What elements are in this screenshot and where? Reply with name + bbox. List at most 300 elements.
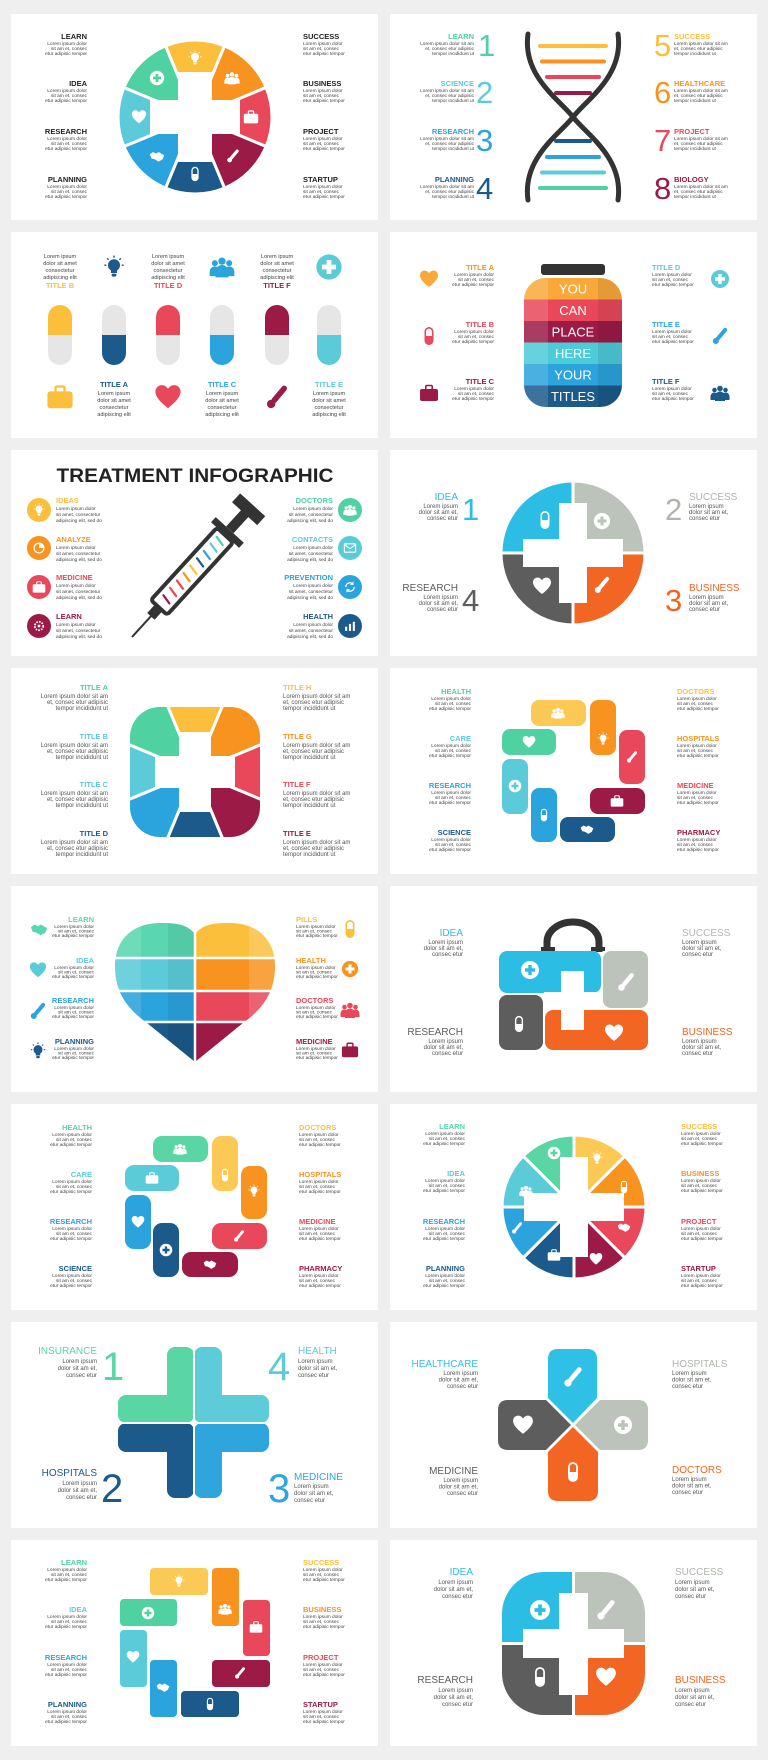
left labels: etur adipisic tempor — [429, 706, 471, 712]
right labels: HOSPITALS — [672, 1359, 728, 1370]
left labels: Lorem ipsum — [428, 1039, 463, 1045]
right labels: etur adipisic tempor — [677, 847, 719, 853]
left labels — [50, 1123, 93, 1289]
item 1: 1 — [102, 1345, 124, 1389]
right labels: Lorem ipsum dolor — [303, 41, 343, 47]
left items: etur adipisic tempor — [52, 933, 94, 939]
item 2 — [42, 1467, 123, 1511]
right labels: SUCCESS — [681, 1122, 717, 1131]
top icons — [104, 254, 342, 280]
right labels — [299, 1123, 342, 1289]
top text columns: TITLE B — [46, 281, 75, 290]
left labels: Lorem ipsum dolor — [52, 1179, 92, 1185]
left labels: etur adipisic tempor — [423, 1283, 465, 1289]
right labels: Lorem ipsum dolor — [299, 1226, 339, 1232]
top text columns: adipiscing elit — [260, 275, 294, 281]
left items: sit am et, consec — [58, 1010, 95, 1016]
left labels: Lorem ipsum dolor — [425, 1178, 465, 1184]
top text columns: TITLE F — [263, 281, 291, 290]
right titles: tempor incididunt ut — [283, 803, 336, 809]
right items: adipiscing elit, sed do — [287, 595, 333, 601]
left items: Lorem ipsum dolor — [454, 329, 494, 335]
right numbered items: et, consec etur adipisic — [674, 141, 723, 147]
left labels: sit am et, consec — [435, 701, 472, 707]
item 1: consec etur — [66, 1373, 97, 1379]
left labels: consec etur — [442, 1702, 473, 1708]
left titles: Lorem ipsum dolor sit am — [41, 694, 108, 700]
left labels: etur adipisic tempor — [45, 194, 87, 200]
right labels: MEDICINE — [299, 1217, 336, 1226]
right numbered items: 8 — [654, 171, 671, 206]
left labels: SCIENCE — [438, 828, 471, 837]
right items: MEDICINE — [296, 1037, 333, 1046]
left titles: et, consec etur adipisic — [47, 700, 108, 706]
left items: LEARN — [68, 915, 94, 924]
top text columns: dolor sit amet — [43, 261, 77, 267]
right labels: BUSINESS — [682, 1027, 733, 1038]
panel: heart — [11, 886, 378, 1092]
right labels: sit am et, consec — [303, 1667, 340, 1673]
left labels: Lorem ipsum — [438, 1580, 473, 1586]
left items: LEARN — [56, 612, 82, 621]
loop icons — [132, 1144, 260, 1269]
right items: DOCTORS — [296, 996, 333, 1005]
item 4: 4 — [268, 1345, 290, 1389]
right labels: PHARMACY — [677, 828, 720, 837]
panel: ribbon circle — [390, 1104, 757, 1310]
right labels: sit am et, consec — [299, 1231, 336, 1237]
left labels: consec etur — [447, 1384, 478, 1390]
left labels — [429, 687, 472, 853]
right numbered items: Lorem ipsum dolor sit am — [674, 41, 728, 47]
left labels: RESEARCH — [407, 1027, 463, 1038]
left titles: Lorem ipsum dolor sit am — [41, 840, 108, 846]
left labels: sit am et, consec — [435, 842, 472, 848]
right labels: etur adipisic tempor — [303, 146, 345, 152]
left titles: TITLE D — [80, 829, 109, 838]
right items: sit am et, consec — [296, 928, 333, 934]
left numbered items: 3 — [476, 123, 493, 158]
right labels: consec etur — [675, 1702, 706, 1708]
left labels: sit am et, consec — [51, 1572, 88, 1578]
right items: etur adipisic tempor — [296, 933, 338, 939]
block ring — [120, 1568, 270, 1717]
left labels: dolor sit am et, — [439, 1378, 478, 1384]
item 2: Lorem ipsum — [689, 504, 724, 510]
right labels: etur adipisic tempor — [303, 1719, 345, 1725]
helix strands — [527, 34, 619, 200]
right labels — [682, 928, 733, 1057]
bottom text columns: dolor sit amet — [205, 398, 239, 404]
right labels: Lorem ipsum — [682, 1039, 717, 1045]
left labels: sit am et, consec — [56, 1137, 93, 1143]
left labels: sit am et, consec — [56, 1278, 93, 1284]
right titles: Lorem ipsum dolor sit am — [283, 743, 350, 749]
right items: etur adipisic tempor — [296, 1014, 338, 1020]
right labels: sit am et, consec — [681, 1231, 718, 1237]
right labels: STARTUP — [303, 1700, 338, 1709]
left labels: etur adipisic tempor — [50, 1236, 92, 1242]
left items: Lorem ipsum dolor — [454, 272, 494, 278]
right labels: Lorem ipsum dolor — [303, 1567, 343, 1573]
left numbered items: PLANNING — [435, 175, 474, 184]
right numbered items — [654, 28, 728, 206]
jar: HERE — [555, 346, 591, 361]
left labels: LEARN — [61, 32, 87, 41]
petal icons — [513, 1365, 632, 1482]
right numbered items: tempor incididunt ut — [674, 146, 717, 152]
left numbered items: et, consec etur adipisic — [425, 141, 475, 147]
loop icons — [509, 708, 638, 834]
right labels: etur adipisic tempor — [299, 1142, 341, 1148]
right labels: BUSINESS — [303, 79, 341, 88]
bottom text columns: Lorem ipsum — [313, 391, 345, 397]
right labels: dolor sit am et, — [672, 1484, 712, 1490]
right items: PREVENTION — [284, 573, 333, 582]
left items: IDEA — [76, 956, 95, 965]
left labels: Lorem ipsum dolor — [47, 1614, 87, 1620]
right labels: SUCCESS — [675, 1567, 724, 1578]
right labels: STARTUP — [303, 175, 338, 184]
right items: Lorem ipsum dolor — [652, 386, 692, 392]
right items: adipiscing elit, sed do — [287, 634, 333, 640]
left labels: Lorem ipsum dolor — [425, 1131, 465, 1137]
top text columns: dolor sit amet — [260, 261, 294, 267]
right labels: sit am et, consec — [299, 1137, 336, 1143]
right labels: Lorem ipsum dolor — [299, 1179, 339, 1185]
right items: adipiscing elit, sed do — [287, 518, 333, 524]
right labels: Lorem ipsum dolor — [681, 1178, 721, 1184]
left numbered items: LEARN — [448, 32, 474, 41]
quadrant square — [500, 1570, 648, 1718]
bag — [499, 922, 648, 1050]
right labels: etur adipisic tempor — [677, 706, 719, 712]
item 2: dolor sit am et, — [689, 510, 729, 516]
bag icons — [515, 961, 636, 1041]
left numbered items: et, consec etur adipisic — [425, 93, 475, 99]
left labels: Lorem ipsum dolor — [52, 1226, 92, 1232]
left labels: Lorem ipsum dolor — [47, 1709, 87, 1715]
right items: sit amet, consectetur — [289, 589, 333, 595]
left labels: sit am et, consec — [435, 795, 472, 801]
left labels: etur adipisic tempor — [45, 98, 87, 104]
left labels: sit am et, consec — [51, 141, 88, 147]
left numbered items: tempor incididunt ut — [432, 51, 475, 57]
right items: sit am et, consec — [652, 277, 689, 283]
left labels: Lorem ipsum dolor — [47, 41, 87, 47]
item 3: dolor sit am et, — [689, 601, 729, 607]
left labels: CARE — [71, 1170, 92, 1179]
right items: sit amet, consectetur — [289, 512, 333, 518]
left labels — [45, 1558, 88, 1725]
bottom text columns: TITLE C — [208, 380, 237, 389]
right items: sit am et, consec — [296, 970, 333, 976]
left labels: consec etur — [442, 1594, 473, 1600]
jar: YOUR — [554, 368, 592, 382]
left numbered items: tempor incididunt ut — [432, 194, 475, 200]
right labels: sit am et, consec — [299, 1278, 336, 1284]
item 1: Lorem ipsum — [423, 504, 458, 510]
right numbered items: 5 — [654, 28, 671, 63]
item 3: Lorem ipsum — [294, 1484, 329, 1490]
item 3 — [665, 583, 740, 618]
left labels: sit am et, consec — [51, 189, 88, 195]
left labels: LEARN — [61, 1558, 87, 1567]
left items: adipiscing elit, sed do — [56, 634, 102, 640]
bottom text columns: TITLE E — [315, 380, 343, 389]
left labels: sit am et, consec — [429, 1278, 466, 1284]
top text columns: TITLE D — [154, 281, 183, 290]
right titles: Lorem ipsum dolor sit am — [283, 694, 350, 700]
right numbered items: Lorem ipsum dolor sit am — [674, 88, 728, 94]
left titles: et, consec etur adipisic — [47, 846, 108, 852]
left labels: etur adipisic tempor — [45, 1577, 87, 1583]
item 4: HEALTH — [298, 1346, 337, 1357]
right items: sit am et, consec — [652, 334, 689, 340]
panel: pills — [11, 232, 378, 438]
item 2: dolor sit am et, — [58, 1488, 97, 1494]
left labels: RESEARCH — [45, 127, 87, 136]
left items: Lorem ipsum dolor — [454, 386, 494, 392]
right items: Lorem ipsum dolor — [296, 1046, 336, 1052]
right labels: sit am et, consec — [677, 701, 714, 707]
bottom text columns: dolor sit amet — [97, 398, 131, 404]
left labels — [423, 1122, 466, 1289]
bottom text columns: adipiscing elit — [312, 412, 346, 418]
item 1: dolor sit am et, — [419, 510, 458, 516]
left labels: sit am et, consec — [56, 1231, 93, 1237]
left labels: IDEA — [69, 79, 88, 88]
right items: PILLS — [296, 915, 317, 924]
left labels: Lorem ipsum dolor — [47, 1567, 87, 1573]
right items: HEALTH — [303, 612, 333, 621]
left labels: etur adipisic tempor — [45, 51, 87, 57]
left labels: Lorem ipsum — [443, 1371, 478, 1377]
left titles: TITLE C — [80, 780, 109, 789]
left items: sit amet, consectetur — [56, 589, 101, 595]
left labels: Lorem ipsum dolor — [431, 696, 471, 702]
left titles: TITLE B — [80, 732, 109, 741]
right labels: SUCCESS — [682, 928, 731, 939]
right titles: TITLE E — [283, 829, 311, 838]
left numbered items: 1 — [478, 28, 495, 63]
item 1: 1 — [462, 492, 479, 527]
item 4: 4 — [462, 583, 479, 618]
item 1: Lorem ipsum — [62, 1359, 97, 1365]
left labels: dolor sit am et, — [434, 1587, 473, 1593]
right labels: sit am et, consec — [299, 1184, 336, 1190]
left labels: Lorem ipsum — [428, 940, 463, 946]
left labels: RESEARCH — [417, 1675, 473, 1686]
right labels: etur adipisic tempor — [303, 51, 345, 57]
left labels: etur adipisic tempor — [45, 1624, 87, 1630]
right titles — [283, 683, 350, 858]
left labels: sit am et, consec — [429, 1136, 466, 1142]
right labels: etur adipisic tempor — [677, 753, 719, 759]
top text columns: dolor sit amet — [151, 261, 185, 267]
top text columns: adipiscing elit — [43, 275, 77, 281]
right numbered items: tempor incididunt ut — [674, 51, 717, 57]
left labels: RESEARCH — [429, 781, 471, 790]
right numbered items: BIOLOGY — [674, 175, 709, 184]
right labels: Lorem ipsum dolor — [677, 696, 717, 702]
left labels: IDEA — [69, 1605, 88, 1614]
left items: sit am et, consec — [58, 928, 95, 934]
ribbon circle chart — [502, 1135, 646, 1279]
left items: Lorem ipsum dolor — [54, 1005, 94, 1011]
right items: Lorem ipsum dolor — [293, 583, 333, 589]
left titles: et, consec etur adipisic — [47, 749, 108, 755]
wheel icons — [132, 50, 258, 181]
bottom text columns: dolor sit amet — [312, 398, 346, 404]
right labels: dolor sit am et, — [675, 1587, 715, 1593]
right labels: Lorem ipsum dolor — [681, 1273, 721, 1279]
bottom text columns: adipiscing elit — [97, 412, 131, 418]
quadrant circle — [501, 481, 645, 625]
top text columns: consectetur — [263, 268, 292, 274]
left labels: HEALTH — [441, 687, 471, 696]
right labels: BUSINESS — [675, 1675, 726, 1686]
right items: Lorem ipsum dolor — [296, 1005, 336, 1011]
right labels: Lorem ipsum dolor — [303, 1614, 343, 1620]
jar: PLACE — [552, 324, 595, 340]
right labels: Lorem ipsum — [682, 940, 717, 946]
left labels: sit am et, consec — [56, 1184, 93, 1190]
right titles: et, consec etur adipisic — [283, 700, 344, 706]
right labels: SUCCESS — [303, 1558, 339, 1567]
left items: adipiscing elit, sed do — [56, 595, 102, 601]
left items: Lorem ipsum dolor — [54, 965, 94, 971]
right labels: consec etur — [672, 1384, 703, 1390]
right items: etur adipisic tempor — [296, 1055, 338, 1061]
item 3: Lorem ipsum — [689, 595, 724, 601]
top text columns — [43, 254, 294, 290]
left items — [420, 263, 495, 402]
item 1: dolor sit am et, — [58, 1366, 97, 1372]
left numbered items — [420, 28, 495, 206]
right labels: dolor sit am et, — [682, 946, 722, 952]
left labels: etur adipisic tempor — [45, 1719, 87, 1725]
right items: Lorem ipsum dolor — [293, 622, 333, 628]
panel: four quadrant circle — [390, 450, 757, 656]
left items: sit am et, consec — [58, 1050, 95, 1056]
block icons — [127, 1574, 262, 1710]
pill row — [48, 305, 341, 365]
right titles: tempor incididunt ut — [283, 852, 336, 858]
left labels: RESEARCH — [423, 1217, 465, 1226]
right titles: tempor incididunt ut — [283, 706, 336, 712]
item 3: consec etur — [294, 1498, 325, 1504]
left items: Lorem ipsum dolor — [56, 545, 96, 551]
left items: Lorem ipsum dolor — [56, 622, 96, 628]
left labels: dolor sit am et, — [439, 1484, 478, 1490]
left labels — [417, 1567, 473, 1708]
right labels: Lorem ipsum — [672, 1477, 707, 1483]
left labels: etur adipisic tempor — [50, 1142, 92, 1148]
item 2: HOSPITALS — [42, 1468, 97, 1479]
right items — [284, 496, 362, 640]
right labels: Lorem ipsum dolor — [299, 1273, 339, 1279]
left labels: etur adipisic tempor — [50, 1283, 92, 1289]
left labels: HEALTH — [62, 1123, 92, 1132]
left labels: Lorem ipsum — [443, 1478, 478, 1484]
left labels: LEARN — [439, 1122, 465, 1131]
right labels — [303, 32, 345, 200]
right items: TITLE E — [652, 320, 680, 329]
right items: CONTACTS — [292, 535, 333, 544]
right items: etur adipisic tempor — [652, 396, 694, 402]
right labels — [677, 687, 720, 853]
jar — [524, 264, 622, 408]
left items: TITLE C — [466, 377, 495, 386]
left items: sit am et, consec — [458, 391, 495, 397]
bottom text columns: consectetur — [315, 405, 344, 411]
left items: IDEAS — [56, 496, 79, 505]
wheel chart — [118, 40, 272, 194]
panel: loop cross B — [11, 1104, 378, 1310]
item 2: consec etur — [689, 516, 720, 522]
left labels: sit am et, consec — [51, 1667, 88, 1673]
left labels: dolor sit am et, — [424, 1045, 463, 1051]
jar: YOU — [559, 282, 587, 296]
left labels: MEDICINE — [429, 1466, 478, 1477]
item 3: BUSINESS — [689, 583, 740, 594]
panel: rounded square quadrants — [390, 1540, 757, 1746]
right items: sit amet, consectetur — [289, 551, 333, 557]
left labels: consec etur — [447, 1491, 478, 1497]
left numbered items: SCIENCE — [441, 79, 474, 88]
left labels: SCIENCE — [59, 1264, 92, 1273]
item 3: consec etur — [689, 607, 720, 613]
loop blocks — [125, 1136, 267, 1277]
right labels: dolor sit am et, — [682, 1045, 722, 1051]
item 2: SUCCESS — [689, 492, 738, 503]
bottom text columns: TITLE A — [100, 380, 129, 389]
left labels: sit am et, consec — [429, 1231, 466, 1237]
top text columns: adipiscing elit — [151, 275, 185, 281]
left numbered items: RESEARCH — [432, 127, 474, 136]
left numbered items: et, consec etur adipisic — [425, 46, 475, 52]
left labels: sit am et, consec — [429, 1183, 466, 1189]
right numbered items: tempor incididunt ut — [674, 194, 717, 200]
left labels: RESEARCH — [45, 1653, 87, 1662]
left labels: HEALTHCARE — [412, 1359, 478, 1370]
right items: Lorem ipsum dolor — [652, 272, 692, 278]
right labels: sit am et, consec — [681, 1136, 718, 1142]
helix rungs — [540, 46, 606, 188]
right titles: tempor incididunt ut — [283, 755, 336, 761]
left labels: etur adipisic tempor — [429, 753, 471, 759]
left items: etur adipisic tempor — [452, 396, 494, 402]
panel: square blocks ring — [11, 1540, 378, 1746]
item 3: MEDICINE — [294, 1472, 343, 1483]
left items: MEDICINE — [56, 573, 93, 582]
right titles: et, consec etur adipisic — [283, 749, 344, 755]
left labels: dolor sit am et, — [424, 946, 463, 952]
right titles: TITLE G — [283, 732, 312, 741]
right labels: sit am et, consec — [303, 1619, 340, 1625]
right numbered items: tempor incididunt ut — [674, 98, 717, 104]
right labels: BUSINESS — [681, 1169, 719, 1178]
item 1: consec etur — [427, 516, 458, 522]
right labels: HOSPITALS — [677, 734, 719, 743]
left labels: IDEA — [450, 1567, 473, 1578]
panel: loop cross A — [390, 668, 757, 874]
left titles: tempor incididunt ut — [56, 755, 108, 761]
left items: etur adipisic tempor — [52, 1014, 94, 1020]
right labels: DOCTORS — [672, 1465, 722, 1476]
quadrant icons — [533, 511, 611, 594]
